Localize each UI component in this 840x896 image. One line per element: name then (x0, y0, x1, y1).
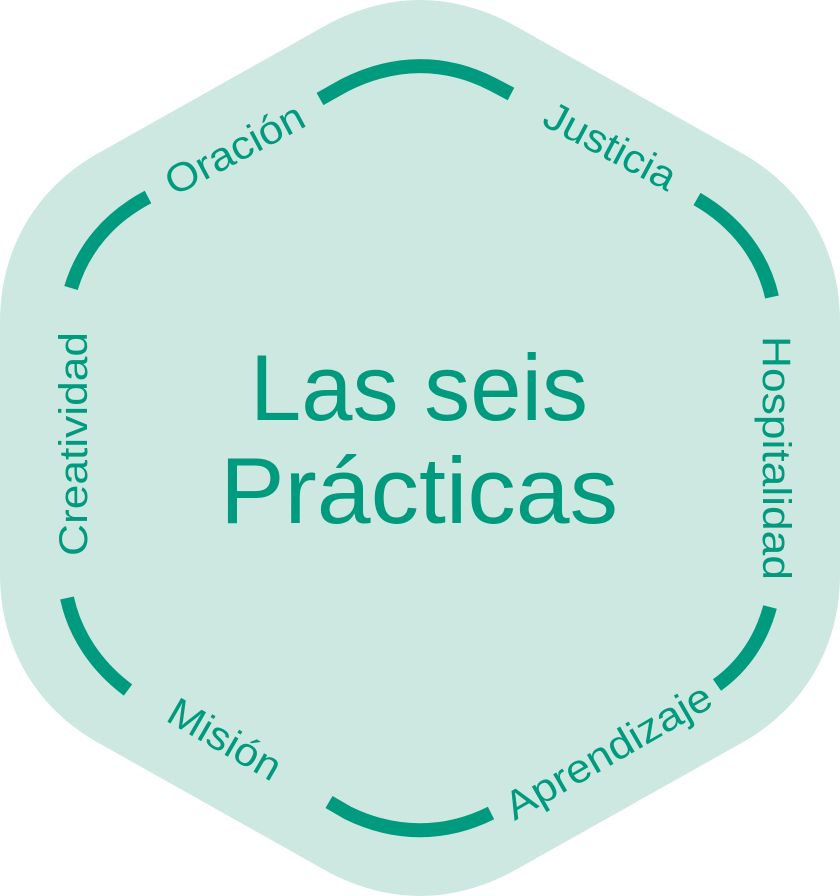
arc: top (320, 66, 511, 99)
title: Las seis (250, 335, 588, 440)
label: Aprendizaje: Aprendizaje (497, 675, 720, 829)
title: Prácticas (220, 438, 618, 543)
arc: upper right (697, 199, 772, 297)
arc: upper left (71, 197, 148, 288)
label: Misión: Misión (160, 690, 289, 790)
circular ring arcs (67, 66, 772, 830)
arc: lower left (67, 598, 128, 690)
label: Justicia: Justicia (536, 93, 685, 200)
label: Oración: Oración (157, 94, 312, 205)
label: Hospitalidad: Hospitalidad (754, 336, 798, 580)
arc: bottom (329, 802, 491, 830)
label: Creatividad: Creatividad (52, 332, 96, 556)
arc: lower right (717, 607, 770, 685)
title (220, 335, 618, 543)
